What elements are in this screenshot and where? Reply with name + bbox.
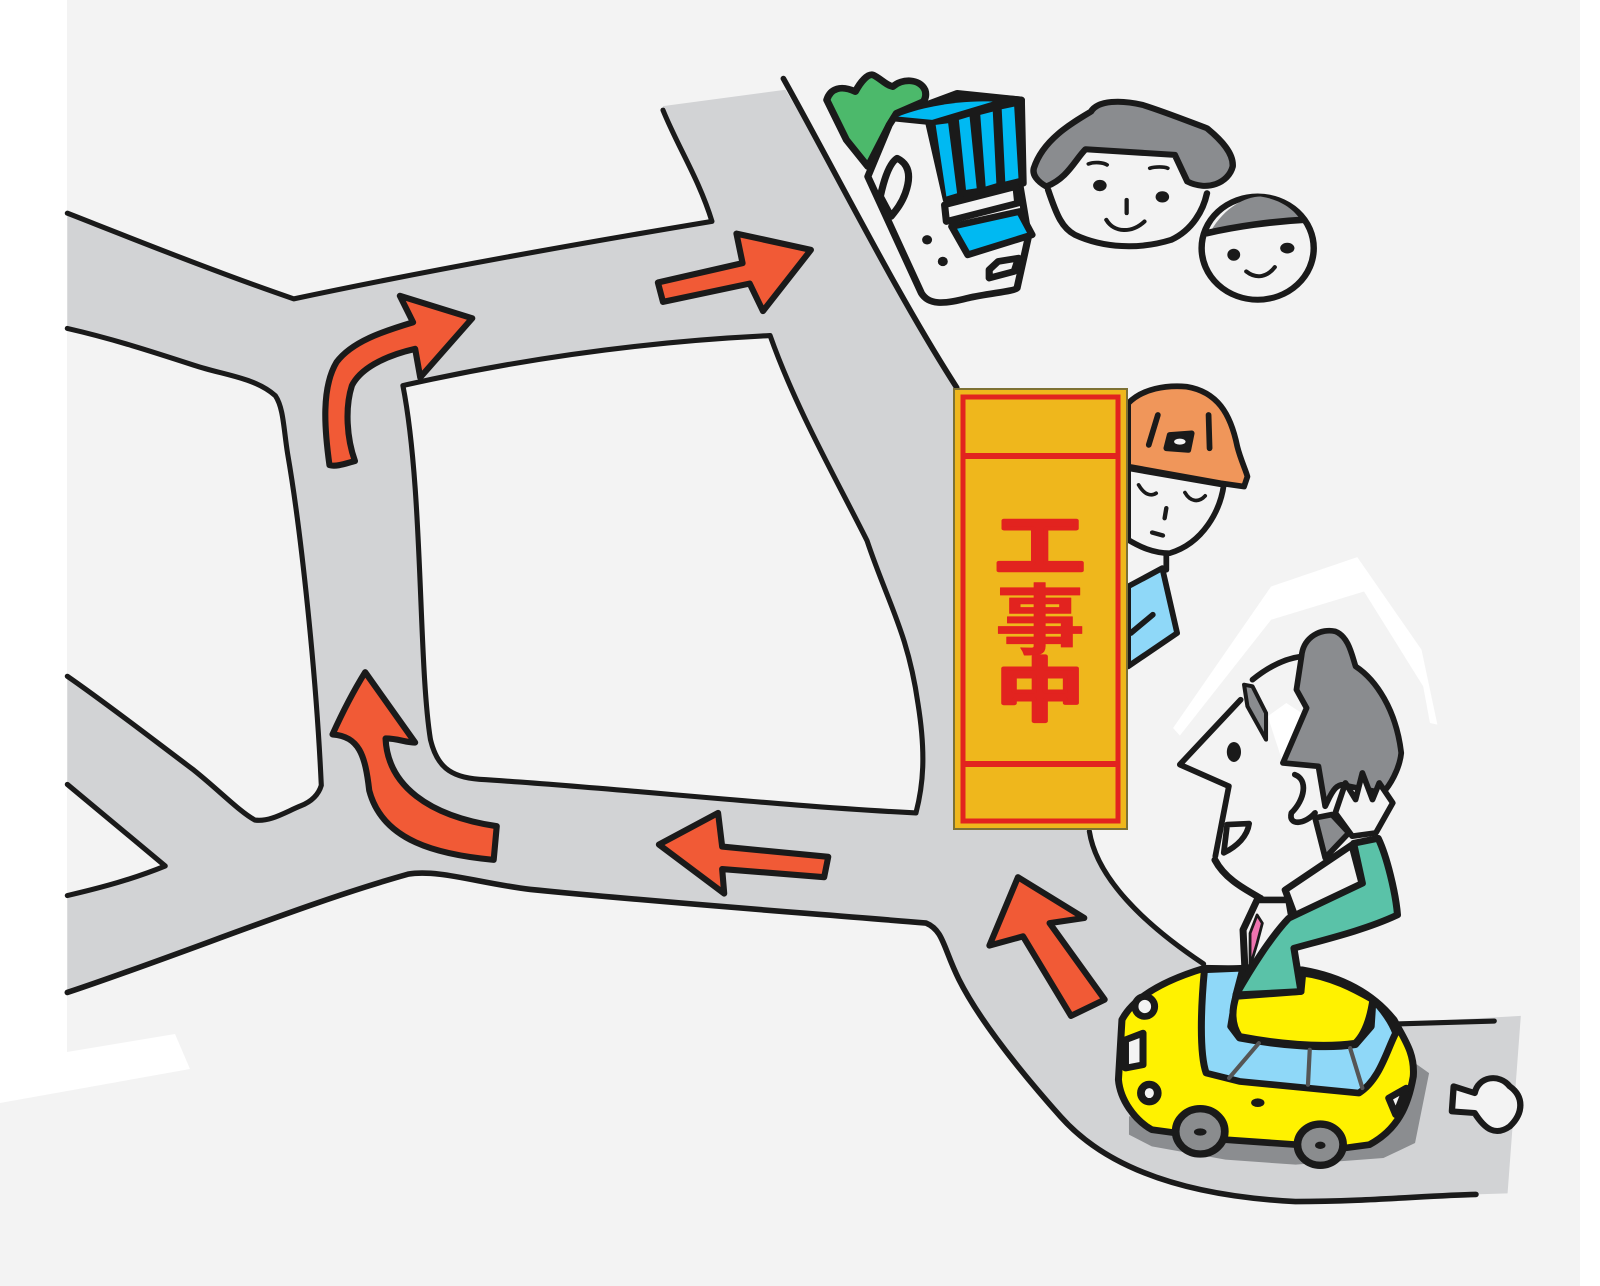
child's face: [1202, 197, 1314, 300]
arrow: from car: [989, 877, 1105, 1016]
exhaust puff: [1452, 1078, 1520, 1131]
car shadow: [1129, 1063, 1429, 1165]
sign text: [995, 510, 1085, 730]
driver's head: [1180, 631, 1401, 870]
yellow car: [1118, 968, 1413, 1165]
sign text: 工: [995, 510, 1085, 583]
white motion halo behind driver: [1173, 557, 1437, 736]
arrow: top right: [658, 234, 811, 311]
arrow: left: [659, 813, 828, 894]
construction worker peeking behind sign: [1128, 386, 1247, 666]
construction sign: [954, 389, 1127, 829]
sign text: 事: [995, 578, 1085, 664]
arrow: curved up-right: [325, 296, 472, 466]
hand holding milk carton and vegetable: [827, 75, 1032, 303]
driver: [1180, 631, 1401, 995]
woman's face: [1033, 102, 1233, 246]
driver's body: [1215, 838, 1397, 995]
road network: [67, 79, 1521, 1202]
sign text: 中: [996, 653, 1084, 730]
arrow: curved up: [333, 672, 497, 860]
